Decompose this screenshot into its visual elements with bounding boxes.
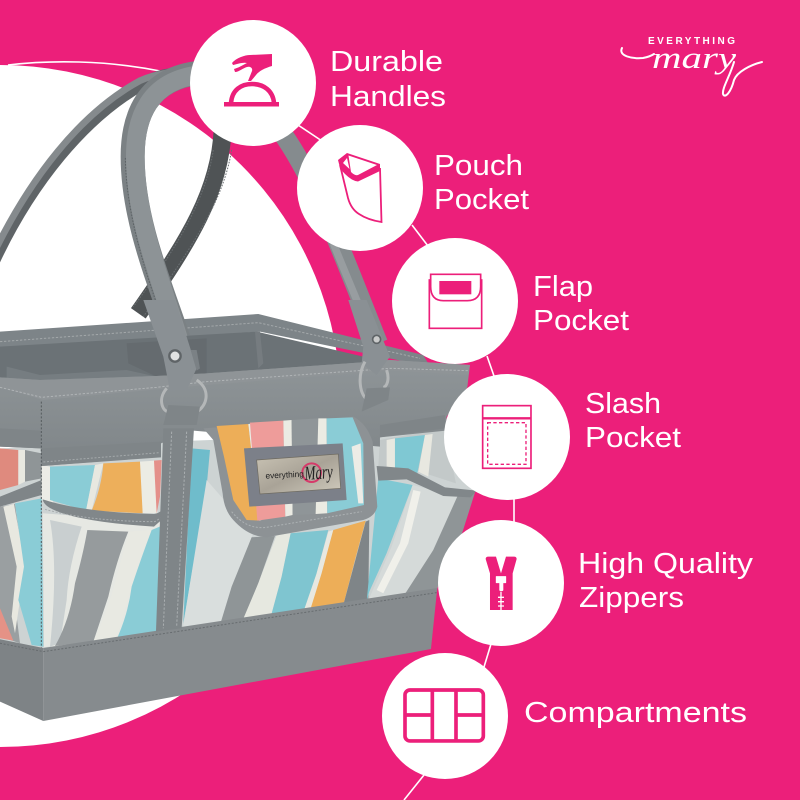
circle: zippers: [438, 520, 564, 646]
bag: [0, 314, 477, 721]
label: pouch pocket: [434, 150, 529, 216]
front bag handle: [125, 73, 378, 343]
icon: pouch: [338, 153, 382, 222]
feature: high quality zippers: [438, 520, 754, 646]
icon: hand on handle: [224, 54, 279, 106]
right pocket stripes: [367, 428, 477, 602]
far-left side panel stripes: [0, 448, 43, 647]
brand plate: Mary: [303, 461, 334, 485]
label: flap pocket: Flap: [533, 271, 593, 303]
feature: compartments: [382, 653, 747, 779]
feature: flap pocket: [392, 238, 629, 364]
circle: pouch pocket: [297, 125, 423, 251]
label: pouch pocket: Pocket: [434, 184, 529, 216]
upper grey band: [0, 360, 470, 713]
label: flap pocket: [533, 271, 629, 337]
handle tabs and rings: [143, 300, 390, 425]
circle: compartments: [382, 653, 508, 779]
bag rear rim and interior: [0, 314, 430, 382]
label: zippers: High Quality: [578, 548, 754, 580]
label: zippers: [578, 548, 754, 614]
icon: flap pocket: [429, 274, 482, 328]
label: zippers: Zippers: [579, 582, 684, 614]
brand plate: [244, 443, 347, 507]
label: slash pocket: Slash: [585, 388, 661, 420]
feature: slash pocket: [444, 374, 681, 500]
brand plate: everything: [265, 469, 304, 481]
label: durable handles: Durable: [330, 46, 443, 78]
label: pouch pocket: Pouch: [434, 150, 523, 182]
left pocket stripes: [42, 460, 173, 647]
label: slash pocket: [585, 388, 681, 454]
circle: slash pocket: [444, 374, 570, 500]
white background circle: [0, 65, 341, 747]
bag base band: [0, 588, 437, 721]
logo: everything mary: [621, 36, 762, 96]
label: flap pocket: Pocket: [533, 305, 629, 337]
rear bag handle: [0, 70, 232, 317]
label: durable handles: [330, 46, 446, 113]
striped base panel: [0, 430, 475, 648]
label: compartments: Compartments: [524, 697, 747, 729]
icon: zipper: [486, 557, 517, 610]
center pocket stripes: [183, 448, 369, 629]
feature: pouch pocket: [297, 125, 529, 251]
feature: durable handles: [190, 20, 446, 146]
label: durable handles: Handles: [330, 81, 446, 113]
connector lines: [8, 62, 514, 800]
center strap: [156, 428, 194, 632]
flap with stripes: [203, 417, 377, 537]
circle: flap pocket: [392, 238, 518, 364]
logo: everything mary: mary: [652, 40, 736, 75]
logo: everything mary: EVERYTHING: [648, 36, 735, 47]
label: slash pocket: Pocket: [585, 422, 681, 454]
icon: slash pocket: [483, 406, 531, 468]
icon: compartments: [405, 690, 483, 741]
circle: durable handles: [190, 20, 316, 146]
